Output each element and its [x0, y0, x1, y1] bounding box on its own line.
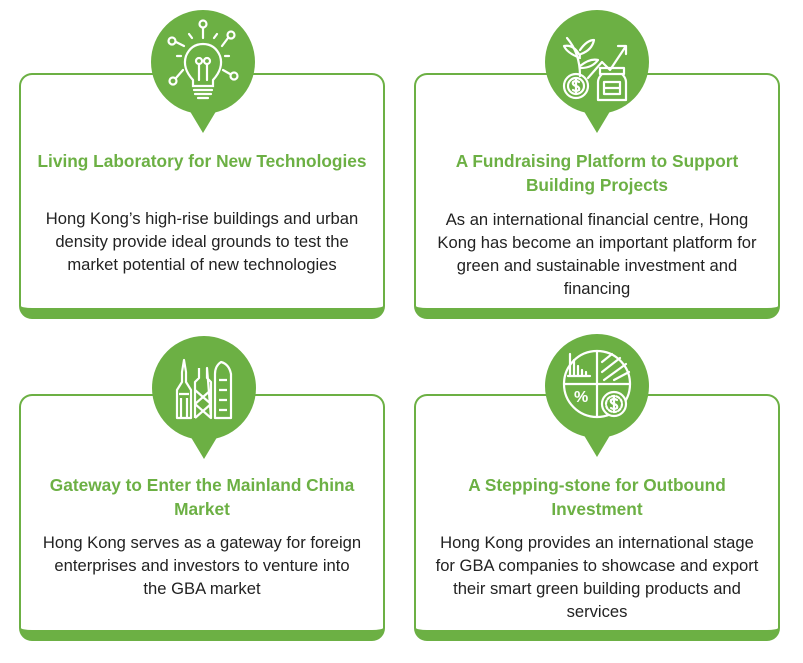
icon: pie chart with dollar: % — [574, 389, 588, 406]
text: gateway: the GBA market — [143, 579, 261, 598]
heading: gateway — [50, 475, 354, 519]
text: fundraising platform: financing — [564, 279, 630, 298]
text: gateway: enterprises and investors to venture into — [54, 556, 350, 575]
heading: fundraising platform: Building Projects — [526, 175, 668, 195]
text: fundraising platform: Kong has become an important platform for — [437, 233, 757, 252]
text: stepping-stone: Hong Kong provides an international stage — [440, 533, 754, 552]
heading: fundraising platform — [456, 151, 738, 195]
text: living laboratory: Hong Kong’s high-rise buildings and urban — [46, 209, 358, 228]
panel: living laboratory — [19, 73, 385, 319]
icon: pie chart with dollar — [545, 334, 649, 457]
heading: gateway: Gateway to Enter the Mainland China — [50, 475, 354, 495]
heading: living laboratory: Living Laboratory for New Technologies — [37, 151, 367, 171]
text: gateway: Hong Kong serves as a gateway for foreign — [43, 533, 361, 552]
text: fundraising platform: green and sustainable investment and — [457, 256, 737, 275]
text: stepping-stone: their smart green building products and — [453, 579, 741, 598]
text: fundraising platform: As an international financial centre, Hong — [446, 210, 748, 229]
heading: fundraising platform: A Fundraising Platform to Support — [456, 151, 738, 171]
text: living laboratory: density provide ideal grounds to test the — [55, 232, 349, 251]
text: stepping-stone: services — [567, 602, 627, 621]
heading: stepping-stone: A Stepping-stone for Outbound — [468, 475, 726, 495]
panel: stepping-stone — [414, 394, 780, 641]
icon: plant, coin and jar — [545, 10, 649, 133]
icon: light bulb — [151, 10, 255, 133]
text: stepping-stone — [436, 533, 758, 621]
heading: gateway: Market — [174, 499, 230, 519]
panel: gateway — [19, 394, 385, 641]
text: fundraising platform — [437, 210, 757, 298]
heading: stepping-stone — [468, 475, 726, 519]
heading: stepping-stone: Investment — [551, 499, 643, 519]
text: gateway — [43, 533, 361, 598]
panel: fundraising platform — [414, 73, 780, 319]
text: living laboratory: market potential of new technologies — [67, 255, 337, 274]
text: stepping-stone: for GBA companies to showcase and export — [436, 556, 758, 575]
text: living laboratory — [46, 209, 358, 274]
icon: city buildings — [152, 336, 256, 459]
